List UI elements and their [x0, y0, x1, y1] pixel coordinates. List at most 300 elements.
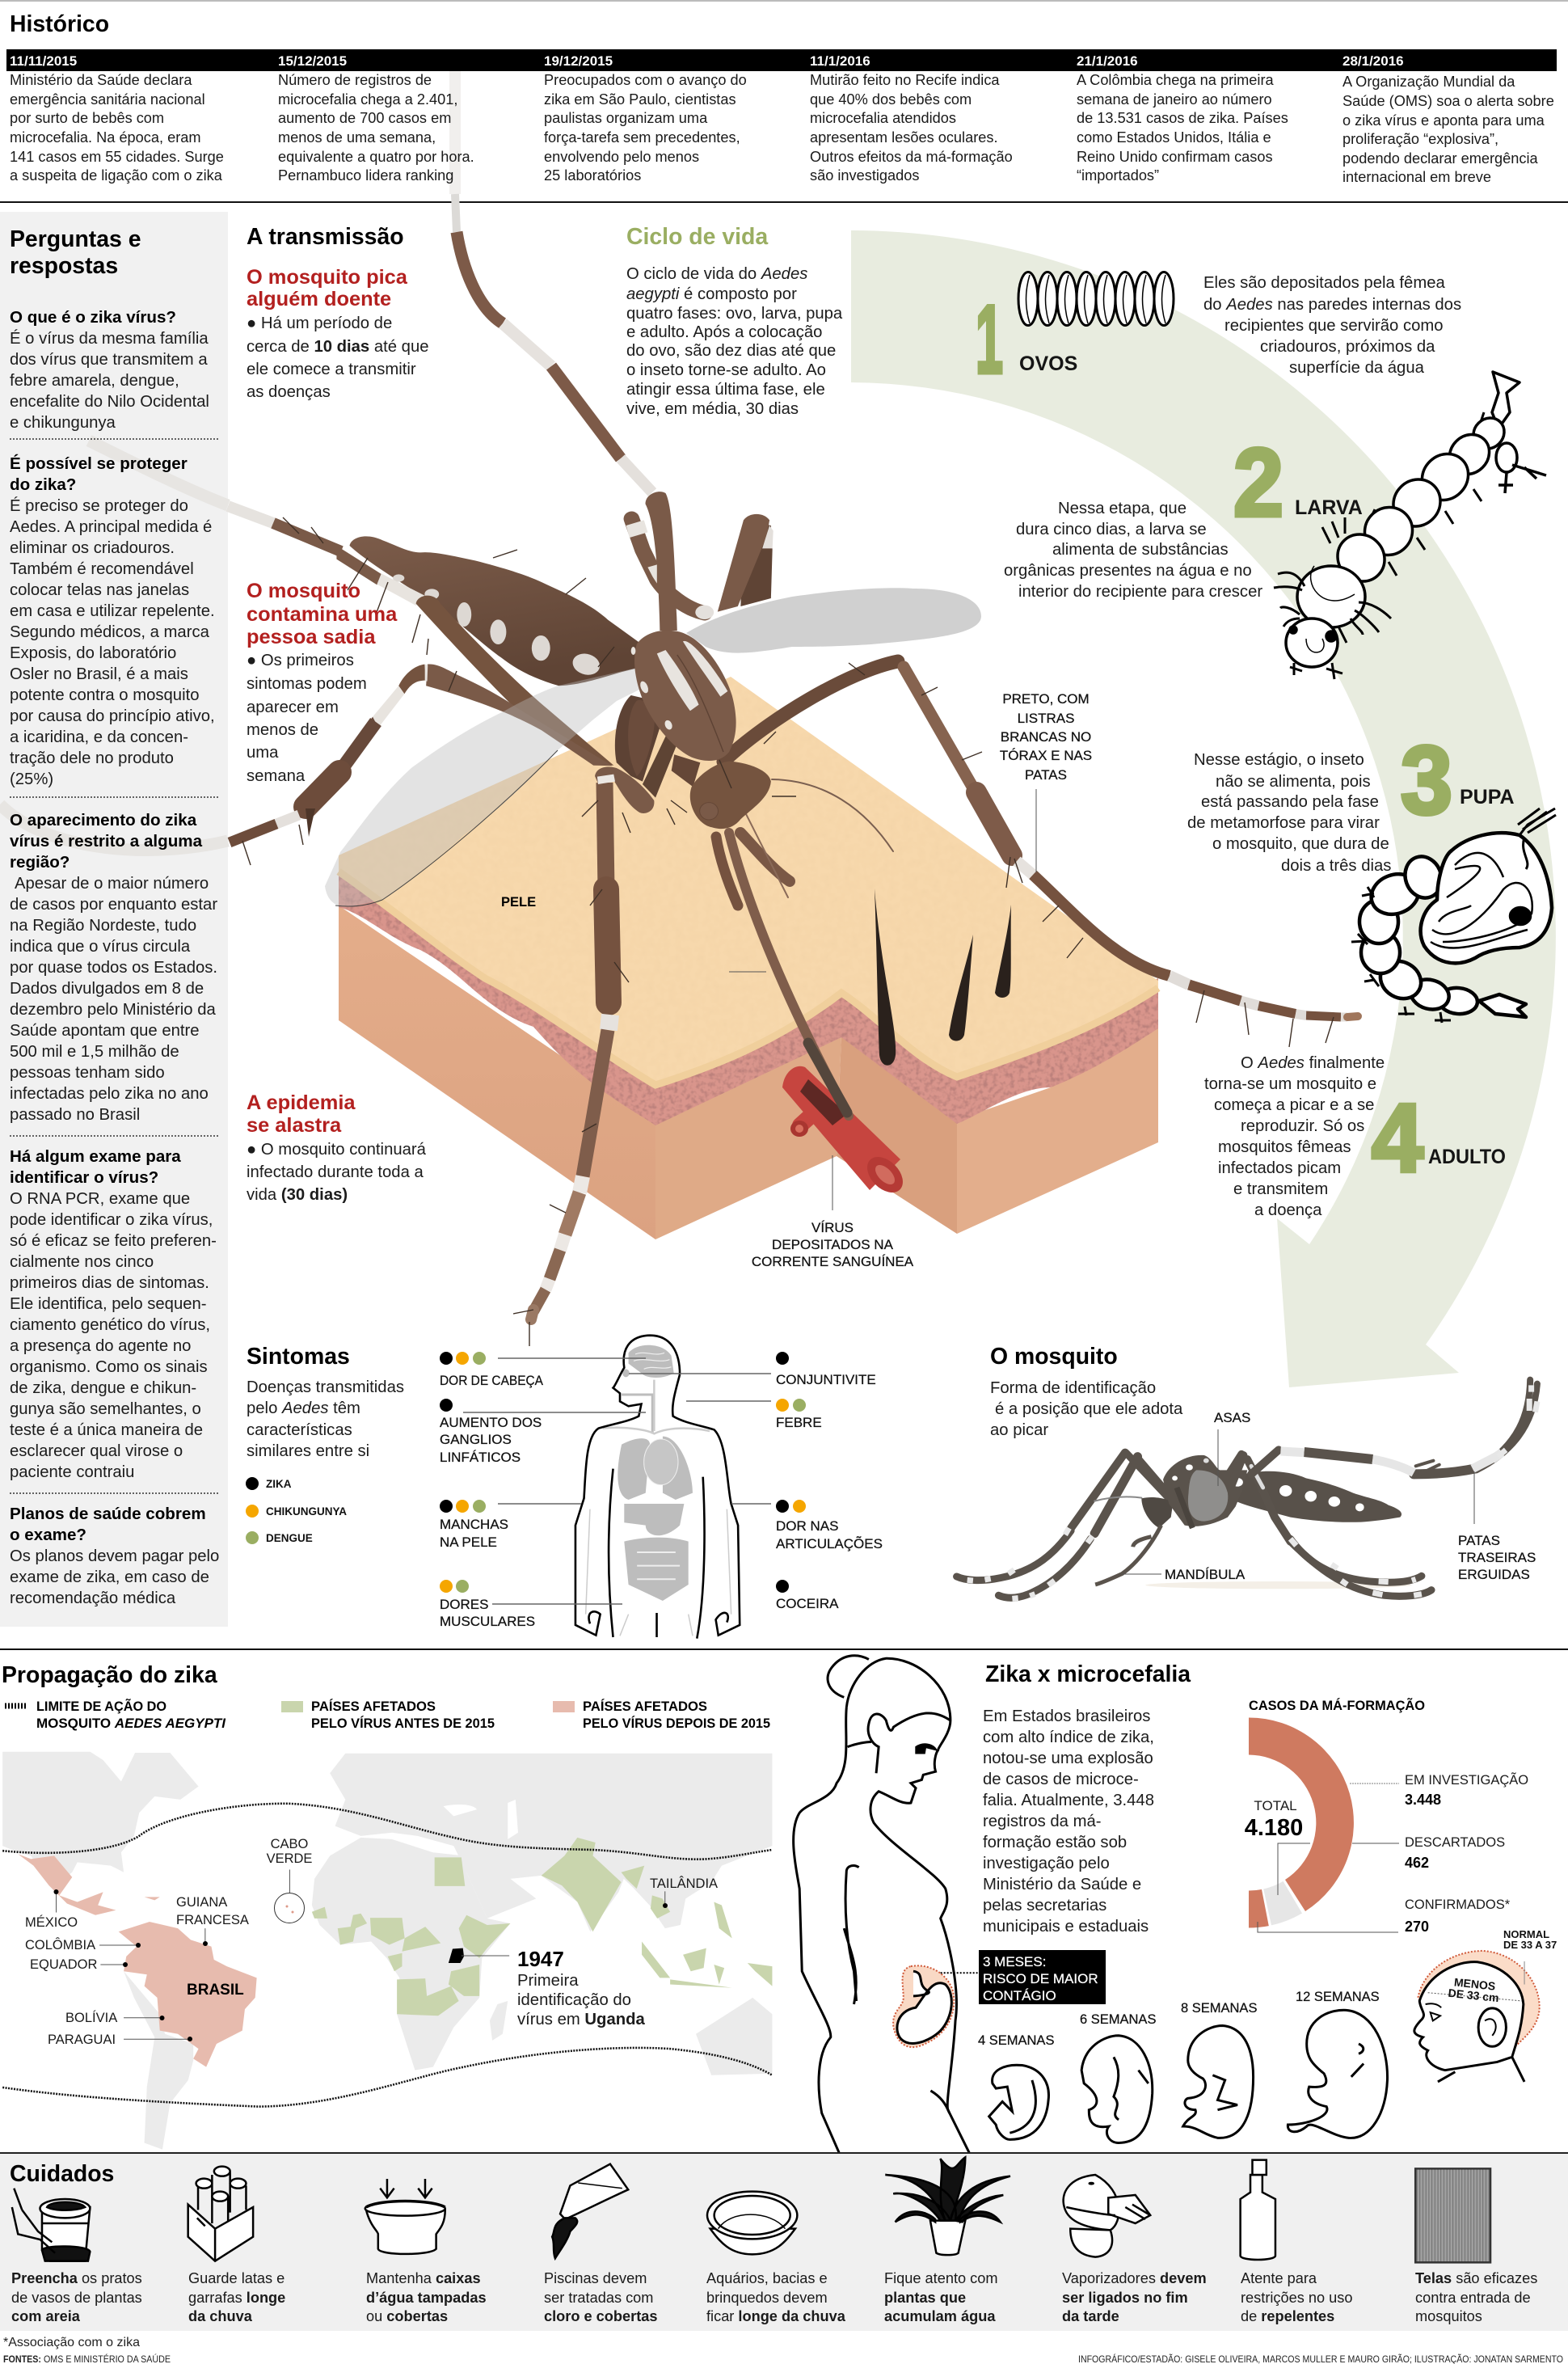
symptom: manchas na pele	[440, 1500, 508, 1550]
captions: garrafas longe	[188, 2290, 285, 2306]
question 2: Aedes. A principal medida é	[10, 518, 212, 536]
timeline entry 19/12/2015: força-tarefa sem precedentes,	[544, 129, 740, 146]
countries before 2015	[312, 1838, 772, 2016]
timeline entry 19/12/2015	[544, 53, 747, 184]
captions: Fique atento com	[884, 2270, 998, 2286]
section: zika x microcefalia	[794, 1656, 1557, 2153]
captions: ser ligados no fim	[1062, 2290, 1188, 2306]
timeline entry 19/12/2015: paulistas organizam uma	[544, 110, 708, 126]
symptom: manchas na pele: MANCHAS	[440, 1517, 508, 1532]
question 2: potente contra o mosquito	[10, 686, 200, 704]
timeline entry 21/1/2016: Reino Unido confirmam casos	[1077, 149, 1273, 165]
question 2: eliminar os criadouros.	[10, 539, 175, 557]
symptom: coceira	[776, 1580, 839, 1611]
question 2: Osler no Brasil, é a mais	[10, 665, 188, 683]
question 4: ciamento genético do vírus,	[10, 1316, 210, 1334]
intro text: pelo Aedes têm	[247, 1399, 360, 1417]
question 3: Saúde apontam que entre	[10, 1022, 200, 1040]
stage 2: larva: dura cinco dias, a larva se	[1016, 521, 1207, 538]
captions: ser tratadas com	[544, 2290, 653, 2306]
captions: Preencha os pratos	[11, 2270, 142, 2286]
timeline entry 21/1/2016: “importados”	[1077, 167, 1159, 184]
map labels: EQUADOR	[30, 1957, 98, 1972]
timeline entry 19/12/2015: Preocupados com o avanço do	[544, 72, 747, 88]
embryo week labels: 4 SEMANAS	[978, 2033, 1054, 2048]
icon: larva	[1274, 372, 1546, 679]
timeline: histórico	[6, 49, 1557, 185]
callout: o mosquito contamina uma pessoa sadia: uma	[247, 744, 279, 762]
chart: casos da má-formação: 3.448	[1405, 1792, 1441, 1808]
stage 1: ovos: Eles são depositados pela fêmea	[1203, 274, 1446, 292]
question 5: Planos de saúde cobrem	[10, 1505, 206, 1523]
stage 4: adulto: ADULTO	[1428, 1146, 1506, 1168]
symptom: conjuntivite: CONJUNTIVITE	[776, 1372, 876, 1387]
question 3	[10, 811, 217, 1124]
wing	[1188, 1470, 1228, 1522]
labels: ERGUIDAS	[1458, 1567, 1530, 1582]
timeline entry 11/11/2015: 11/11/2015	[10, 53, 77, 69]
question 2: por causa do princípio ativo,	[10, 707, 215, 725]
map legend: MOSQUITO AEDES AEGYPTI	[36, 1716, 226, 1731]
callout: 3 meses: CONTÁGIO	[983, 1988, 1056, 2003]
chart: casos da má-formação: DESCARTADOS	[1405, 1835, 1505, 1850]
timeline entry 28/1/2016	[1342, 53, 1554, 185]
timeline entry 11/11/2015: por surto de bebês com	[10, 110, 164, 126]
question 4: gunya são semelhantes, o	[10, 1400, 201, 1418]
map location dots	[53, 1889, 668, 2041]
abdomen	[349, 536, 639, 686]
callout: o mosquito contamina uma pessoa sadia: contamina uma	[247, 603, 398, 626]
heading: propagação: Propagação do zika	[2, 1662, 217, 1688]
right leg	[723, 661, 1358, 1017]
question 2: Também é recomendável	[10, 560, 194, 578]
callout: a epidemia se alastra: ● O mosquito continuará	[247, 1141, 427, 1159]
timeline entry 11/11/2015: microcefalia. Na época, eram	[10, 129, 201, 146]
embryo 12 semanas	[1288, 2010, 1388, 2138]
question 2: Exposis, do laboratório	[10, 644, 176, 662]
chart: casos da má-formação: TOTAL	[1254, 1798, 1297, 1813]
head measure labels: MENOS	[1453, 1975, 1496, 1993]
question 1: O que é o zika vírus?	[10, 308, 176, 327]
stage 1: ovos: 1	[976, 285, 1003, 394]
label: vírus depositados: VÍRUS	[811, 1220, 854, 1235]
question 3: vírus é restrito a alguma	[10, 832, 203, 851]
chart: casos da má-formação: EM INVESTIGAÇÃO	[1405, 1771, 1528, 1788]
chart: casos da má-formação: 270	[1405, 1919, 1429, 1935]
stage 4: adulto: 4	[1372, 1084, 1423, 1193]
heading: perguntas e respostas: respostas	[10, 253, 118, 279]
captions: d’água tampadas	[366, 2290, 487, 2306]
timeline entry 19/12/2015: 25 laboratórios	[544, 167, 641, 184]
stage 4: adulto: começa a picar e a se	[1214, 1096, 1374, 1114]
callout: o mosquito contamina uma pessoa sadia: ● Os primeiros	[247, 652, 354, 669]
question 3: Apesar de o maior número	[15, 875, 209, 893]
label: vírus depositados: CORRENTE SANGUÍNEA	[752, 1254, 914, 1269]
callout: o mosquito contamina uma pessoa sadia: menos de	[247, 721, 318, 739]
timeline entry 28/1/2016: o zika vírus e aponta para uma	[1342, 112, 1545, 129]
stage 4: adulto	[1204, 1054, 1506, 1219]
map labels: COLÔMBIA	[25, 1937, 95, 1952]
map labels: GUIANA	[176, 1895, 227, 1910]
stage 3: pupa: não se alimenta, pois	[1216, 773, 1371, 791]
front knee	[595, 766, 654, 813]
map legend: PELO VÍRUS ANTES DE 2015	[311, 1716, 495, 1731]
symptom: coceira: COCEIRA	[776, 1596, 839, 1611]
front-left leg lower segments	[230, 722, 376, 842]
callout: o mosquito contamina uma pessoa sadia: aparecer em	[247, 699, 339, 716]
map labels: TAILÂNDIA	[650, 1876, 718, 1891]
intro text: e adulto. Após a colocação	[626, 323, 822, 341]
question 1	[10, 308, 209, 432]
timeline entry 11/1/2016: Outros efeitos da má-formação	[810, 149, 1013, 165]
heading: o mosquito: O mosquito	[990, 1344, 1118, 1370]
timeline entry 21/1/2016: A Colômbia chega na primeira	[1077, 72, 1275, 88]
callout: o mosquito pica alguém doente	[247, 266, 429, 401]
symptom: febre	[776, 1399, 822, 1430]
stage 4: adulto: O Aedes finalmente	[1241, 1054, 1385, 1072]
stage 3: pupa: 3	[1401, 726, 1452, 834]
timeline entry 21/1/2016: de 13.531 casos de zika. Países	[1077, 110, 1288, 126]
symptom: dor de cabeça: DOR DE CABEÇA	[440, 1373, 544, 1388]
inset: cabo verde: CABO	[271, 1837, 309, 1851]
stage 2: larva: alimenta de substâncias	[1052, 541, 1229, 559]
timeline entry 21/1/2016: 21/1/2016	[1077, 53, 1138, 69]
labels: MANDÍBULA	[1165, 1567, 1246, 1582]
question 3: de casos por enquanto estar	[10, 896, 217, 914]
captions: mosquitos	[1415, 2308, 1482, 2324]
intro text: investigação pelo	[983, 1855, 1110, 1872]
question 2: É preciso se proteger do	[10, 496, 188, 515]
labels: ASAS	[1214, 1410, 1250, 1425]
embryo 6 semanas	[1081, 2036, 1153, 2142]
embryo week labels	[978, 1990, 1380, 2048]
callout: a epidemia se alastra: vida (30 dias)	[247, 1186, 348, 1204]
question 5: Os planos devem pagar pelo	[10, 1547, 219, 1565]
symptom: dores musculares: DORES	[440, 1597, 488, 1612]
callout: 3 meses: RISCO DE MAIOR	[983, 1971, 1098, 1986]
timeline entry 11/11/2015	[10, 53, 224, 184]
question 4: paciente contraiu	[10, 1463, 134, 1481]
front-left leg: tibia and femur	[339, 664, 612, 784]
symptom: dor de cabeça	[440, 1352, 544, 1388]
map labels	[25, 1876, 718, 2047]
stage 3: pupa: Nesse estágio, o inseto	[1194, 751, 1364, 769]
stage 3: pupa: de metamorfose para virar	[1187, 814, 1380, 832]
embryo week labels: 6 SEMANAS	[1080, 2012, 1156, 2027]
timeline entry 19/12/2015: 19/12/2015	[544, 53, 613, 69]
stage 2: larva: LARVA	[1295, 496, 1363, 519]
stage 4: adulto: torna-se um mosquito e	[1204, 1075, 1376, 1093]
legend: ZIKA	[266, 1478, 292, 1490]
question 1: encefalite do Nilo Ocidental	[10, 393, 209, 411]
left wing	[325, 668, 639, 907]
timeline entry 15/12/2015	[278, 53, 474, 184]
baby head	[1418, 1951, 1540, 2050]
symptom: conjuntivite	[776, 1352, 876, 1387]
womb with fetus	[893, 1965, 954, 2047]
labels	[1122, 1410, 1536, 1582]
callout: 1947	[517, 1947, 645, 2028]
embryo week labels: 8 SEMANAS	[1181, 2001, 1257, 2016]
question 3: indica que o vírus circula	[10, 938, 191, 956]
icons row	[12, 2157, 1490, 2262]
timeline entry 28/1/2016: proliferação “explosiva”,	[1342, 131, 1498, 147]
illustration: pregnant woman and embryos	[794, 1656, 1540, 2153]
question 5	[10, 1505, 219, 1607]
timeline entry 11/1/2016: Mutirão feito no Recife indica	[810, 72, 1000, 88]
faded leg lower inside panel	[0, 804, 228, 850]
timeline entry 19/12/2015: envolvendo pelo menos	[544, 149, 699, 165]
intro text: de casos de microce-	[983, 1771, 1139, 1788]
embryo 8 semanas	[1183, 2026, 1254, 2138]
question 1: e chikungunya	[10, 414, 116, 432]
question 4	[10, 1147, 217, 1481]
question 1: febre amarela, dengue,	[10, 372, 179, 390]
hair follicles	[875, 889, 1011, 1066]
white leg bands	[1280, 1451, 1502, 1473]
stage 2: larva: 2	[1233, 428, 1283, 537]
label: preto com listras: PRETO, COM	[1002, 691, 1090, 707]
callout: a epidemia se alastra	[247, 1091, 427, 1204]
intro text: O ciclo de vida do Aedes	[626, 265, 807, 283]
captions: de repelentes	[1241, 2308, 1334, 2324]
timeline entry 11/11/2015: a suspeita de ligação com o zika	[10, 167, 223, 184]
timeline entry 21/1/2016: como Estados Unidos, Itália e	[1077, 129, 1271, 146]
icon: screen	[1415, 2168, 1490, 2262]
inset: cabo verde: VERDE	[267, 1851, 312, 1866]
body diagram	[575, 1336, 740, 1639]
intro text: ao picar	[990, 1421, 1048, 1439]
legs	[957, 1453, 1241, 1598]
labels: TRASEIRAS	[1458, 1550, 1536, 1565]
world map	[2, 1752, 772, 2150]
head measure labels: NORMAL	[1503, 1928, 1549, 1940]
intro text: quatro fases: ovo, larva, pupa	[626, 305, 843, 323]
question 3: região?	[10, 853, 70, 872]
aedes limit lines	[2, 1804, 772, 2107]
question 4: de zika, dengue e chikun-	[10, 1379, 196, 1397]
captions: acumulam água	[884, 2308, 996, 2324]
timeline entry 11/1/2016	[810, 53, 1013, 184]
icon: bowl	[707, 2192, 797, 2254]
palps and proboscis	[716, 779, 893, 1116]
heading: zika x microcefalia: Zika x microcefalia	[985, 1661, 1191, 1687]
icon: cans in a box	[188, 2167, 253, 2261]
intro text: características	[247, 1421, 352, 1439]
panel: perguntas e respostas	[0, 212, 228, 1627]
symptom: aumento dos gânglios: LINFÁTICOS	[440, 1450, 521, 1465]
section: ciclo de vida	[626, 224, 1556, 1219]
chart: casos da má-formação: CASOS DA MÁ-FORMAÇÃO	[1249, 1697, 1425, 1713]
callout: 1947: vírus em Uganda	[517, 2011, 645, 2028]
timeline entry 11/1/2016: microcefalia atendidos	[810, 110, 956, 126]
raised back leg, real coordinates	[455, 194, 652, 492]
intro text: Doenças transmitidas	[247, 1378, 404, 1396]
question 5: o exame?	[10, 1526, 86, 1544]
stage 1: ovos: recipientes que servirão como	[1224, 317, 1444, 335]
question 5: exame de zika, em caso de	[10, 1568, 209, 1586]
label: vírus depositados: DEPOSITADOS NA	[772, 1237, 894, 1252]
question 3: dezembro pelo Ministério da	[10, 1001, 216, 1019]
question 3: por quase todos os Estados.	[10, 959, 217, 977]
timeline entry 21/1/2016	[1077, 53, 1288, 184]
title: Histórico: Histórico	[10, 11, 109, 37]
intro text: notou-se uma explosão	[983, 1750, 1153, 1767]
blood vessel	[782, 1066, 909, 1199]
faded top of raised leg behind timeline	[449, 71, 461, 194]
stage 1: ovos: OVOS	[1019, 352, 1077, 375]
captions: Piscinas devem	[544, 2270, 647, 2286]
captions: de vasos de plantas	[11, 2290, 142, 2306]
callout: a epidemia se alastra: A epidemia	[247, 1091, 356, 1114]
label: preto com listras: LISTRAS	[1018, 711, 1074, 726]
icon: repellent	[1241, 2160, 1275, 2260]
back-left leg outer segments	[228, 506, 341, 551]
icon: pot with sand	[12, 2189, 90, 2261]
captions: da chuva	[188, 2308, 253, 2324]
symptom: dores musculares	[440, 1580, 535, 1629]
Uganda	[449, 1948, 464, 1963]
question 4: pode identificar o zika vírus,	[10, 1211, 213, 1229]
label: preto com listras: PATAS	[1025, 767, 1067, 783]
stage 3: pupa	[1187, 726, 1556, 1023]
question 3: O aparecimento do zika	[10, 811, 197, 830]
dermis layer	[339, 865, 1158, 1125]
question 2: do zika?	[10, 475, 76, 494]
chart: casos da má-formação: 4.180	[1245, 1815, 1303, 1841]
callout: o mosquito pica alguém doente: cerca de 10 dias até que	[247, 338, 429, 356]
map labels: PARAGUAI	[48, 2033, 116, 2047]
stage 2: larva: orgânicas presentes na água e no	[1004, 562, 1252, 580]
intro text: vive, em média, 30 dias	[626, 400, 799, 418]
intro text: atingir essa última fase, ele	[626, 381, 825, 399]
intro text: Em Estados brasileiros	[983, 1708, 1150, 1725]
stage 4: adulto: mosquitos fêmeas	[1218, 1138, 1351, 1156]
intro text: aegypti é composto por	[626, 285, 797, 303]
callout: 3 meses: 3 MESES:	[983, 1954, 1046, 1969]
map legend: PAÍSES AFETADOS	[583, 1699, 707, 1714]
stage 1: ovos	[976, 272, 1461, 394]
timeline entry 15/12/2015: aumento de 700 casos em	[278, 110, 451, 126]
question 2: em casa e utilizar repelente.	[10, 602, 215, 620]
callout: 1947: Primeira	[517, 1972, 579, 1990]
question 4: organismo. Como os sinais	[10, 1358, 208, 1376]
stage 1: ovos: superfície da água	[1289, 359, 1425, 377]
timeline entry 15/12/2015: 15/12/2015	[278, 53, 347, 69]
head measure labels: DE 33 A 37	[1503, 1939, 1557, 1951]
inset: cabo verde	[267, 1837, 312, 1923]
timeline entry 15/12/2015: equivalente a quatro por hora.	[278, 149, 474, 165]
callout: a epidemia se alastra: infectado durante toda a	[247, 1163, 424, 1181]
abdomen	[1236, 1471, 1402, 1522]
front leg down	[531, 783, 610, 1319]
neck and head	[672, 754, 771, 829]
timeline entry 28/1/2016: internacional em breve	[1342, 169, 1491, 185]
life-cycle arrow	[851, 230, 1556, 1387]
label: pele: PELE	[501, 895, 536, 910]
symptom: febre: FEBRE	[776, 1415, 822, 1430]
embryo week labels: 12 SEMANAS	[1296, 1990, 1380, 2004]
question 3: 500 mil e 1,5 milhão de	[10, 1043, 179, 1061]
timeline entry 11/11/2015: 141 casos em 55 cidades. Surge	[10, 149, 224, 165]
stage 3: pupa: o mosquito, que dura de	[1212, 835, 1389, 853]
label: preto com listras: BRANCAS NO	[1001, 729, 1091, 745]
timeline entry 11/11/2015: Ministério da Saúde declara	[10, 72, 192, 88]
question 3: pessoas tenham sido	[10, 1064, 165, 1082]
stage 2: larva: Nessa etapa, que	[1058, 500, 1187, 517]
label: preto com listras: TÓRAX E NAS	[1000, 748, 1092, 763]
symptom: dor nas articulações: ARTICULAÇÕES	[776, 1536, 883, 1551]
head measure labels: DE 33 cm	[1448, 1986, 1499, 2004]
symptom: dor nas articulações: DOR NAS	[776, 1518, 838, 1534]
map legend: PELO VÍRUS DEPOIS DE 2015	[583, 1716, 770, 1731]
icon: plant	[885, 2157, 1010, 2255]
panel: cuidados	[0, 2152, 1568, 2331]
section: propagação do zika	[2, 1662, 772, 2150]
map labels: MÉXICO	[25, 1914, 78, 1930]
question 2: tração dele no produto	[10, 749, 174, 767]
countries after 2015	[18, 1854, 257, 2067]
timeline entry 28/1/2016: A Organização Mundial da	[1342, 74, 1515, 90]
callout: o mosquito pica alguém doente: ● Há um período de	[247, 314, 392, 332]
captions: brinquedos devem	[706, 2290, 828, 2306]
stage 3: pupa: dois a três dias	[1281, 857, 1391, 875]
head	[1141, 1497, 1173, 1528]
intro text: pelas secretarias	[983, 1897, 1106, 1914]
symptom: manchas na pele: NA PELE	[440, 1534, 497, 1550]
captions: cloro e cobertas	[544, 2308, 658, 2324]
thorax	[1163, 1455, 1247, 1528]
back-left leg: tarsus band and femur	[336, 546, 613, 766]
timeline entry 11/1/2016: 11/1/2016	[810, 53, 870, 69]
question 4: O RNA PCR, exame que	[10, 1190, 190, 1208]
legend: CHIKUNGUNYA	[266, 1505, 347, 1518]
intro text: municipais e estaduais	[983, 1918, 1149, 1936]
callout: a epidemia se alastra: se alastra	[247, 1114, 342, 1137]
icon: pupa	[1351, 808, 1556, 1023]
question 4: primeiros dias de sintomas.	[10, 1274, 209, 1292]
icon: vaporizer	[1064, 2175, 1150, 2257]
icon: pouring chlorine	[552, 2164, 628, 2258]
question 4: Ele identifica, pelo sequen-	[10, 1295, 207, 1313]
intro text: com alto índice de zika,	[983, 1729, 1154, 1746]
timeline entry 15/12/2015: microcefalia chega a 2.401,	[278, 91, 457, 108]
callout: o mosquito contamina uma pessoa sadia: semana	[247, 767, 306, 785]
heading: ciclo de vida: Ciclo de vida	[626, 224, 768, 250]
question 4: identificar o vírus?	[10, 1168, 158, 1187]
stage 3: pupa: está passando pela fase	[1201, 793, 1379, 811]
labels: PATAS	[1458, 1533, 1500, 1548]
stage 1: ovos: do Aedes nas paredes internas dos	[1203, 296, 1461, 314]
captions: restrições no uso	[1241, 2290, 1353, 2306]
chart: casos da má-formação: 462	[1405, 1855, 1429, 1871]
symptom: dor nas articulações	[776, 1500, 883, 1551]
intro text: formação estão sob	[983, 1834, 1127, 1851]
woman outline	[794, 1656, 969, 2153]
label: preto com listras	[1000, 691, 1092, 872]
question 4: esclarecer qual virose o	[10, 1442, 183, 1460]
chart: casos da má-formação: CONFIRMADOS*	[1405, 1898, 1511, 1912]
chart: casos da má-formação	[1245, 1697, 1528, 1935]
callout: 3 meses	[979, 1950, 1106, 2004]
timeline entry 15/12/2015: menos de uma semana,	[278, 129, 436, 146]
label: vírus depositados	[752, 1155, 914, 1269]
stage 2: larva	[1004, 372, 1546, 679]
question 4: teste é a única maneira de	[10, 1421, 203, 1439]
stage 4: adulto: e transmitem	[1233, 1180, 1328, 1198]
callout: o mosquito contamina uma pessoa sadia	[247, 580, 398, 785]
head measure labels	[1448, 1928, 1557, 2004]
